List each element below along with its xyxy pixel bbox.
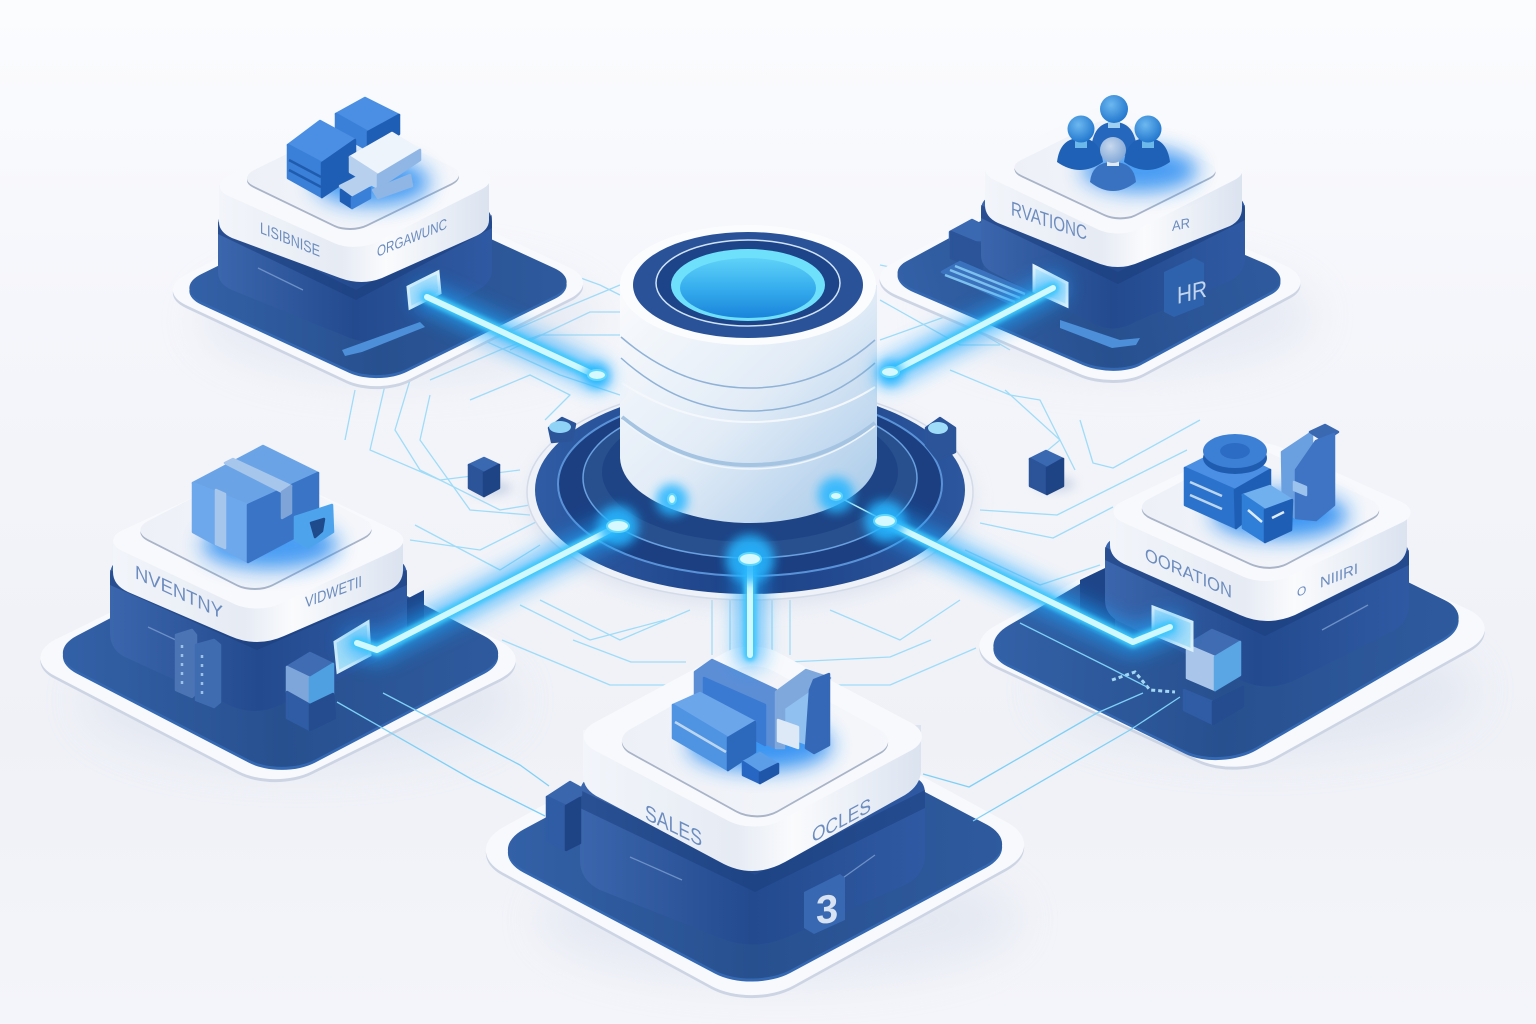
cylinder bands (621, 337, 875, 469)
icon: sales stand (695, 660, 830, 753)
kiosk (1184, 630, 1243, 724)
data strip on plate (1060, 320, 1140, 348)
label: left face: SALES (645, 799, 702, 852)
number tile: 3 (816, 887, 838, 933)
label: right face: VIDWETII (305, 572, 362, 612)
racks (176, 630, 220, 707)
icon: cabinet (1185, 448, 1270, 528)
side box (547, 782, 581, 850)
connector port (408, 272, 440, 308)
node: HR (top right) (861, 95, 1319, 392)
central database (527, 225, 973, 606)
label: right face: OCLES (812, 793, 871, 848)
connector port (335, 622, 370, 672)
data marks on plate (1112, 672, 1175, 692)
label: left face: OORATION (1145, 544, 1232, 602)
ring sensors (549, 418, 955, 460)
traces crossing the plates (337, 623, 1180, 821)
node: operations (right) (957, 425, 1507, 781)
small cube: right (1030, 451, 1075, 494)
HR tile: HR (1177, 276, 1207, 310)
connection beams (357, 288, 1170, 655)
kiosk (287, 653, 335, 730)
HR tile (1164, 258, 1207, 317)
icon: file stack (942, 220, 1030, 304)
label: right face: ORGAWUNC (377, 216, 447, 261)
label: left face: LISIBNISE (260, 219, 320, 261)
beam endpoints (584, 360, 905, 583)
cylinder top (620, 225, 876, 345)
label: left face: NVENTNY (135, 562, 223, 624)
cylinder body (620, 285, 877, 523)
small cube: left (469, 458, 512, 496)
icon: gear (1203, 434, 1267, 474)
icon: sales boxes (673, 693, 778, 783)
icon: people group (1057, 95, 1170, 191)
icon: stacked storage boxes (288, 98, 420, 208)
base rings (527, 384, 973, 606)
node: sales (bottom) (462, 638, 1048, 1011)
connector port (1034, 266, 1067, 306)
node: business (top left) (154, 98, 602, 398)
number tile (804, 874, 845, 934)
circuit traces (345, 265, 1200, 685)
connector port (1153, 607, 1192, 650)
icon: shield tag (295, 505, 333, 548)
node: inventory (left) (19, 446, 537, 793)
label: right face: AR (1172, 215, 1190, 234)
icon: tall panel (1282, 425, 1338, 520)
label: left face: RVATIONC (1011, 197, 1087, 245)
icon: package (193, 446, 318, 562)
data strip on plate (342, 322, 425, 356)
icon: small cube (1243, 486, 1292, 542)
label: right badge: O (1297, 583, 1307, 600)
label: right face: NIIIRI (1320, 561, 1358, 592)
